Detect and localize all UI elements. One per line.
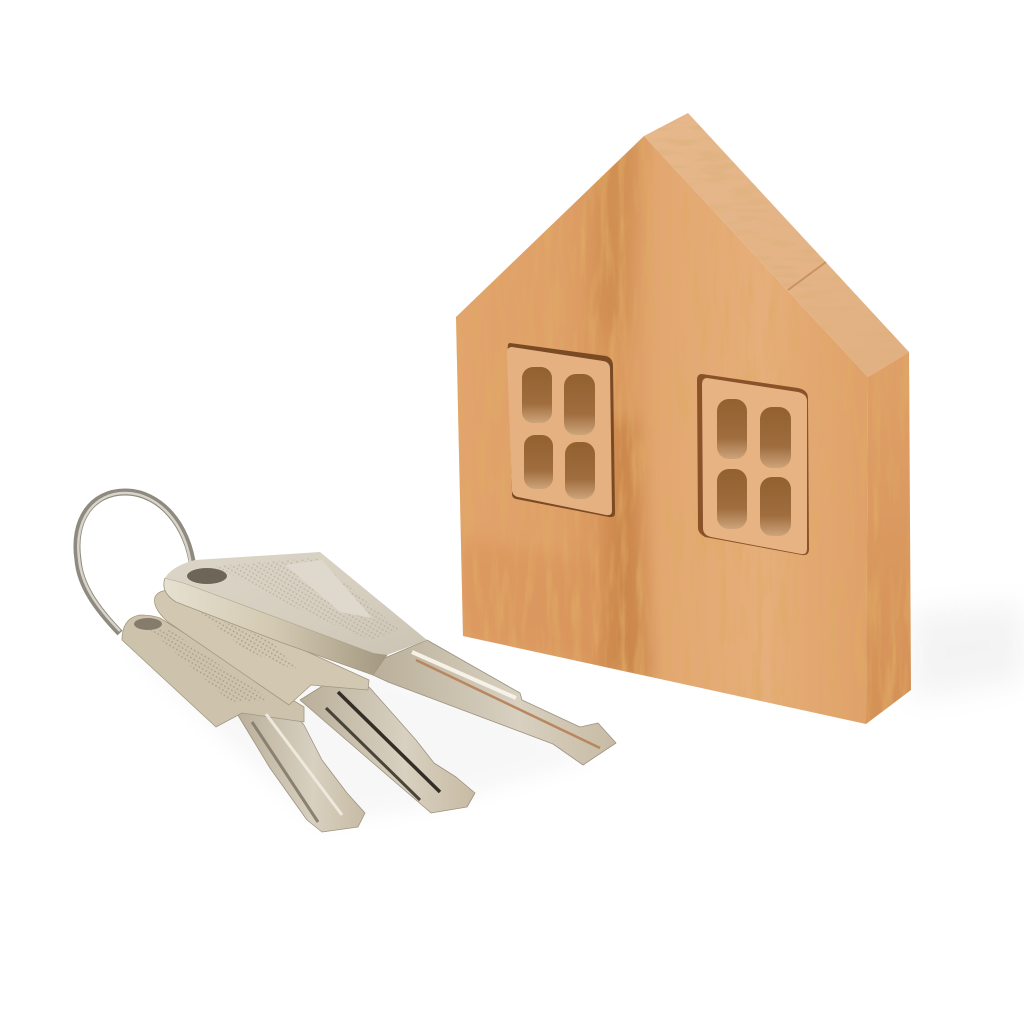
key ring bbox=[77, 492, 193, 633]
window panes bbox=[717, 399, 791, 536]
roof joint bbox=[788, 262, 826, 290]
back key dotted face bbox=[150, 630, 270, 702]
front key smooth label bbox=[285, 560, 372, 618]
back key bbox=[122, 615, 365, 832]
front key stem bbox=[373, 640, 616, 765]
keys bbox=[122, 552, 616, 832]
side grain bbox=[866, 370, 911, 723]
middle key dotted face bbox=[200, 612, 300, 672]
window panes bbox=[522, 367, 595, 499]
window frame bbox=[507, 347, 612, 515]
front key head side bbox=[164, 578, 387, 675]
cast shadow of keys bbox=[130, 650, 590, 825]
back key hole bbox=[134, 618, 162, 630]
front key bbox=[164, 552, 616, 765]
front key hole bbox=[187, 568, 227, 584]
back key head bbox=[122, 615, 304, 727]
house front face bbox=[456, 136, 868, 724]
window recess bbox=[697, 374, 809, 555]
front key dotted face bbox=[215, 558, 400, 640]
right window bbox=[697, 374, 809, 555]
middle key stem bbox=[300, 672, 475, 813]
left window bbox=[507, 343, 615, 517]
back key stem bbox=[236, 698, 365, 832]
window recess bbox=[508, 343, 615, 517]
middle key bbox=[155, 590, 475, 813]
illustration: wooden house with keys bbox=[73, 113, 1016, 832]
roof end grain bbox=[656, 118, 909, 366]
middle key head bbox=[155, 590, 369, 705]
house right side bbox=[866, 352, 911, 724]
wooden house bbox=[450, 110, 914, 730]
front key head face bbox=[165, 552, 427, 655]
window frame bbox=[702, 378, 807, 554]
front dark centre band bbox=[450, 130, 875, 730]
back key details bbox=[266, 714, 342, 815]
middle key dark groove bbox=[338, 692, 440, 792]
front key highlights bbox=[412, 652, 516, 698]
cast shadow of house bbox=[912, 604, 1024, 700]
house roof side bbox=[644, 113, 909, 377]
